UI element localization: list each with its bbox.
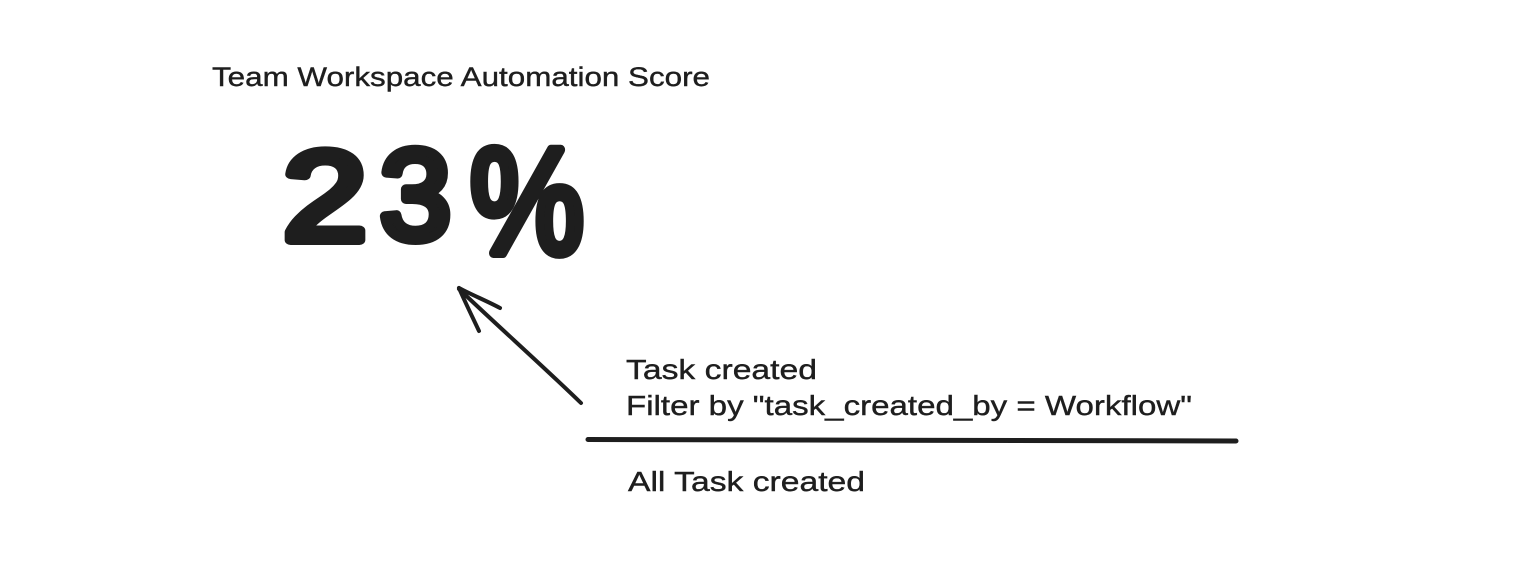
numerator text: Filter by "task_created_by = Workflow" <box>626 390 1192 421</box>
big score value: % <box>470 117 584 285</box>
fraction line <box>588 440 1236 441</box>
numerator text: Task created <box>626 354 817 385</box>
big score value: 2 <box>283 125 367 267</box>
big score value: 3 <box>380 124 451 266</box>
numerator text <box>626 354 1192 421</box>
arrow pointing to score <box>459 288 581 403</box>
title: Team Workspace Automation Score <box>212 62 710 92</box>
denominator text: All Task created <box>628 466 865 497</box>
